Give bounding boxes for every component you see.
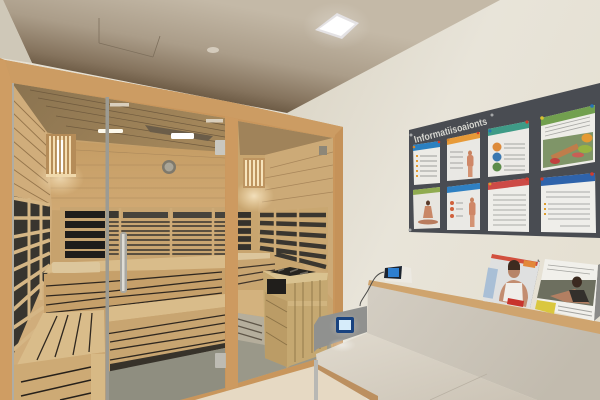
- right side wall: [262, 138, 333, 202]
- magazine right: [535, 259, 600, 321]
- board title: Informatiisoaionts: [413, 116, 489, 146]
- poster 1: [413, 141, 440, 185]
- bench seat wood base: [317, 364, 378, 400]
- lower bench: [106, 294, 225, 372]
- bench seat: [316, 333, 537, 400]
- door glass edge and handle: [106, 97, 127, 400]
- backrest dark slats: [65, 210, 225, 258]
- sauna heater: [263, 267, 328, 367]
- upper bench: [43, 255, 225, 314]
- poster pins: [413, 104, 594, 185]
- poster 6: [447, 183, 480, 230]
- frame posts: [0, 60, 343, 400]
- right ceiling: [238, 121, 333, 155]
- poster 3: [488, 121, 529, 177]
- wall lamp left: [39, 134, 80, 193]
- information board: [408, 83, 600, 238]
- poster 2: [447, 132, 480, 181]
- ceiling: [3, 0, 500, 113]
- cable: [360, 272, 384, 306]
- sauna interior left glass: [14, 84, 225, 400]
- shelf: [368, 280, 600, 334]
- door hinges: [215, 140, 227, 368]
- bench leg: [314, 360, 318, 400]
- poster 4: [541, 105, 595, 171]
- poster 7: [488, 178, 529, 232]
- side backrest slats: [238, 212, 326, 270]
- poster 5: [413, 187, 440, 229]
- ceiling light: [303, 2, 371, 50]
- right wall lamp: [238, 158, 271, 210]
- bench backrest: [367, 285, 600, 400]
- sauna interior right glass: [234, 121, 334, 391]
- magazine left: [483, 254, 540, 308]
- right wall: [287, 0, 600, 400]
- left wall: [0, 0, 32, 63]
- sauna cabin frame: [0, 58, 343, 400]
- tabletop device: [384, 264, 412, 283]
- back wall: [50, 140, 225, 215]
- bench armrest with screen: [314, 306, 367, 352]
- corner bench: [13, 310, 105, 400]
- rear benches: [238, 253, 333, 383]
- left side wall: [14, 86, 52, 365]
- poster 8: [541, 173, 596, 233]
- floor inside cabin: [106, 348, 225, 400]
- floor: [195, 358, 367, 400]
- glass edges: [12, 83, 14, 400]
- wooden ceiling: [12, 83, 225, 153]
